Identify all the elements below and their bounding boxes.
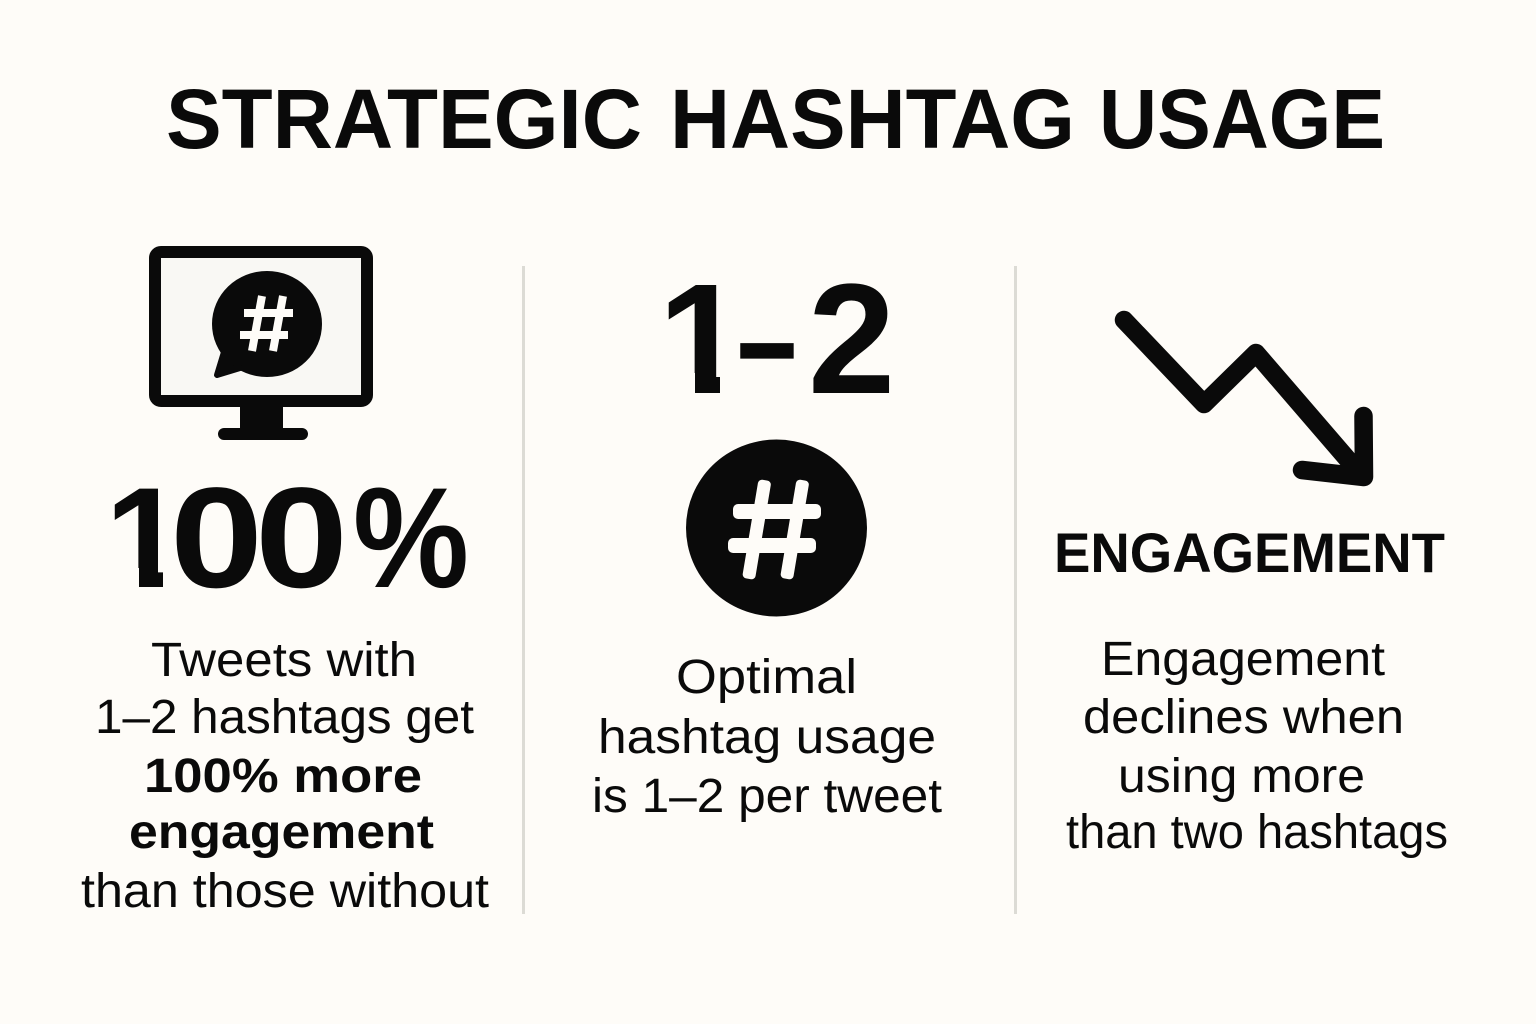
statistic: 100%: 1 xyxy=(105,459,185,618)
description: engagement declines: declines when xyxy=(1083,691,1404,744)
icon: monitor with hashtag speech bubble xyxy=(155,252,367,440)
icon: hashtag circle xyxy=(686,440,867,616)
description: tweets with hashtags: 1–2 hashtags get xyxy=(95,691,474,744)
description: tweets with hashtags xyxy=(81,634,489,918)
panel: optimal usage xyxy=(592,252,942,823)
title: USAGE xyxy=(1099,72,1385,166)
statistic: 100% xyxy=(96,459,469,618)
icon: declining arrow xyxy=(1124,320,1364,477)
statistic: 100%: 0 xyxy=(255,459,348,618)
description: engagement declines: than two hashtags xyxy=(1066,806,1448,859)
heading: engagement: ENGAGEMENT xyxy=(1054,521,1445,584)
description: engagement declines: using more xyxy=(1118,750,1365,803)
title: HASHTAG xyxy=(670,72,1075,166)
description: tweets with hashtags: Tweets with xyxy=(151,634,417,687)
description: engagement declines xyxy=(1066,633,1448,859)
statistic: 1–2: 2 xyxy=(808,252,895,427)
description: engagement declines: Engagement xyxy=(1101,633,1385,686)
panel: engagement decline xyxy=(1054,320,1448,859)
description: optimal hashtag usage: Optimal xyxy=(676,651,857,704)
description: optimal hashtag usage: hashtag usage xyxy=(598,711,936,764)
title xyxy=(166,72,1385,166)
statistic: 1–2 xyxy=(648,252,895,427)
statistic: 100%: % xyxy=(353,459,469,618)
description: optimal hashtag usage: is 1–2 per tweet xyxy=(592,770,942,823)
description: tweets with hashtags: engagement xyxy=(129,806,434,859)
statistic: 1–2: – xyxy=(737,252,797,427)
statistic: 100%: 0 xyxy=(170,459,263,618)
description: tweets with hashtags: 100% more xyxy=(144,750,422,803)
panel: hashtags double engagement xyxy=(81,252,489,918)
title: STRATEGIC xyxy=(166,72,642,166)
description: optimal hashtag usage xyxy=(592,651,942,823)
statistic: 1–2: 1 xyxy=(658,252,745,427)
description: tweets with hashtags: than those without xyxy=(81,865,489,918)
